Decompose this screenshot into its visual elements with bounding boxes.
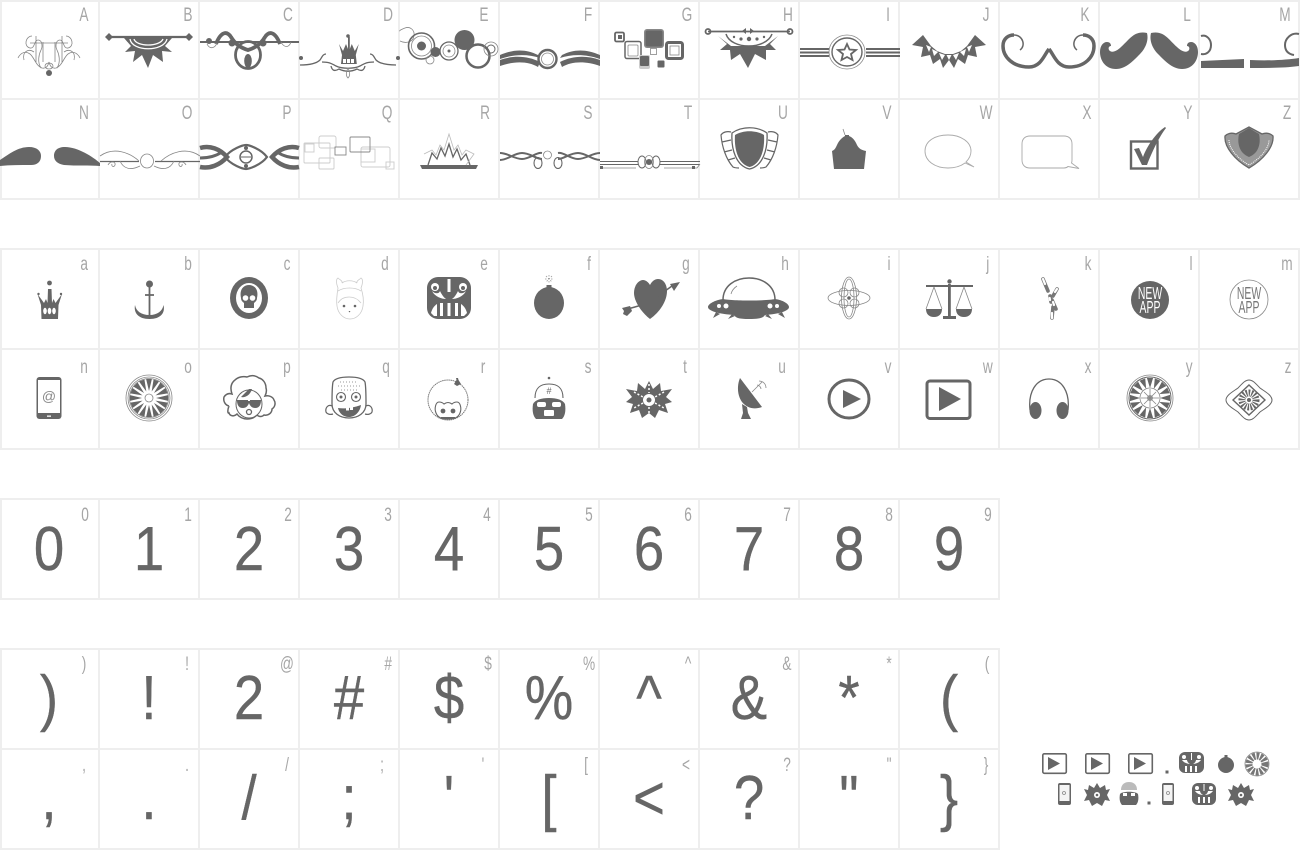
cell ampersand: &: [782, 653, 792, 675]
cell J: bunting: [912, 4, 989, 68]
cell s: cap and beard: #: [546, 386, 552, 396]
cell w: play square: w: [982, 356, 993, 378]
cell asterisk: [838, 653, 892, 733]
cell c: skull medallion: [230, 253, 290, 319]
cell p: afro with shades: p: [283, 356, 291, 378]
cell s: cap and beard: s: [585, 356, 591, 378]
cell s: cap and beard: [533, 356, 591, 419]
cell g: heart with arrow: [622, 253, 690, 319]
cell A: swirl ornament: A: [79, 4, 89, 26]
cell at sign: @: [280, 653, 294, 675]
cell n: smartphone: @: [42, 388, 56, 404]
cell 4: 4: [483, 504, 491, 526]
cell M: handlebar moustache: M: [1279, 4, 1291, 26]
cell apostrophe: ': [482, 754, 484, 776]
cell f: bomb: f: [587, 253, 591, 275]
cell K: curly moustache: [1003, 4, 1094, 67]
cell hash: #: [334, 664, 365, 733]
cell 0: [34, 504, 89, 584]
cell U: winged shield: U: [778, 102, 788, 124]
cell 2: [234, 504, 292, 584]
cell k: pills: [1043, 253, 1092, 318]
cell I: star badge stripes: I: [886, 4, 890, 26]
cell S: twisted ribbon: [500, 102, 600, 168]
cell b: anchor: [135, 253, 192, 319]
cell v: play circle: [829, 356, 892, 418]
cell e: tiki mask: e: [480, 253, 488, 275]
cell P: braided eye ornament: [200, 102, 299, 169]
cell N: wide moustache: [0, 102, 100, 166]
cell V: cupcake: V: [882, 102, 892, 124]
cell q: goofy face: [326, 356, 390, 418]
section: punctuation row two: [41, 754, 989, 833]
cell C: horned ornament: [200, 4, 299, 68]
cell at sign: [234, 653, 294, 733]
cell z: diamond emblem: [1226, 356, 1291, 420]
cell asterisk: *: [886, 653, 892, 675]
cell caret: ^: [636, 664, 662, 733]
cell H: swag banner: [706, 4, 793, 68]
cell B: sunburst banner: [105, 4, 193, 68]
cell A: swirl ornament: [18, 4, 89, 76]
cell double quote: [839, 754, 892, 833]
cell exclamation: !: [141, 664, 157, 733]
cell Z: ornate shield: Z: [1283, 102, 1291, 124]
cell hash: #: [384, 653, 393, 675]
cell L: filled moustache: L: [1183, 4, 1191, 26]
cell semicolon: ;: [380, 754, 384, 776]
cell v: play circle: v: [885, 356, 892, 378]
cell period: [141, 754, 189, 833]
cell apostrophe: [444, 754, 484, 833]
cell t: snowflake: t: [683, 356, 687, 378]
cell 1: [134, 504, 192, 584]
cell slash: [241, 754, 289, 833]
cell 8: 8: [834, 515, 864, 584]
cell l: new app badge filled: [1131, 253, 1193, 319]
cell at sign: 2: [234, 664, 264, 733]
cell question: ?: [734, 764, 764, 833]
cell l: new app badge filled: NEW: [1138, 284, 1162, 304]
cell g: heart with arrow: g: [682, 253, 690, 275]
cell percent: %: [525, 664, 573, 733]
cell exclamation: [141, 653, 189, 733]
cell less than: <: [682, 754, 690, 776]
cell D: crown on swirl line: D: [383, 4, 393, 26]
cell ampersand: [731, 653, 792, 733]
cell O: thin scroll line: O: [182, 102, 192, 124]
cell comma: ,: [82, 754, 86, 776]
cell u: satellite dish: u: [778, 356, 786, 378]
cell k: pills: k: [1085, 253, 1092, 275]
cell close brace: }: [940, 764, 958, 833]
cell W: round speech bubble: W: [980, 102, 993, 124]
cell 5: 5: [585, 504, 593, 526]
cell 9: 9: [984, 504, 992, 526]
section: digits: [34, 504, 992, 584]
cell dollar: [434, 653, 492, 733]
cell E: circles ornament: [400, 4, 498, 68]
cell percent: %: [583, 653, 595, 675]
cell close paren: ): [82, 653, 86, 675]
cell p: afro with shades: [224, 356, 291, 419]
cell e: tiki mask: [427, 253, 488, 319]
cell bracket: [: [541, 764, 557, 833]
cell comma: ,: [41, 764, 57, 833]
cell 8: 8: [885, 504, 893, 526]
cell j: scales: j: [985, 253, 989, 275]
cell o: compass wheel: [126, 356, 192, 421]
cell 3: 3: [384, 504, 392, 526]
cell 0: 0: [81, 504, 89, 526]
cell a: crown: a: [80, 253, 89, 275]
cell W: round speech bubble: [925, 102, 993, 168]
cell x: headphones: [1030, 356, 1092, 419]
cell n: smartphone: [36, 356, 88, 419]
cell 3: [334, 504, 392, 584]
cell dollar: $: [434, 664, 464, 733]
cell a: crown: [37, 253, 89, 319]
cell U: winged shield: [721, 102, 788, 169]
cell X: square speech bubble: X: [1082, 102, 1092, 124]
cell semicolon: [341, 754, 384, 833]
cell j: scales: [926, 253, 989, 319]
cell asterisk: *: [838, 664, 860, 733]
cell I: star badge stripes: [800, 4, 900, 69]
cell bracket: [: [584, 754, 588, 776]
section: lowercase icons: [36, 253, 1293, 421]
cell slash: /: [285, 754, 289, 776]
cell m: new app badge outline: [1230, 253, 1293, 319]
cell h: ufo: h: [781, 253, 789, 275]
cell 9: 9: [934, 515, 964, 584]
cell 6: 6: [684, 504, 692, 526]
cell n: smartphone: n: [80, 356, 88, 378]
cell z: diamond emblem: z: [1285, 356, 1291, 378]
cell bracket: [541, 754, 588, 833]
cell F: banded arc with ring: F: [584, 4, 592, 26]
cell close paren: ): [40, 664, 58, 733]
cell y: ornate wheel: y: [1186, 356, 1193, 378]
cell l: new app badge filled: l: [1189, 253, 1193, 275]
cell close paren: [40, 653, 86, 733]
cell hash: [334, 653, 393, 733]
cell R: spiked crown: R: [480, 102, 490, 124]
cell 7: 7: [783, 504, 791, 526]
cell caret: ^: [685, 653, 691, 675]
cell period: .: [141, 764, 157, 833]
cell 4: 4: [434, 515, 464, 584]
cell o: compass wheel: o: [184, 356, 192, 378]
cell D: crown on swirl line: [299, 4, 400, 78]
cell dollar: $: [484, 653, 492, 675]
cell r: afro skull: [428, 356, 486, 420]
cell m: new app badge outline: m: [1281, 253, 1293, 275]
cell h: ufo: [708, 253, 789, 319]
cell T: lined ornament: T: [684, 102, 692, 124]
cell P: braided eye ornament: P: [282, 102, 292, 124]
cell F: banded arc with ring: [500, 4, 600, 68]
cell ampersand: &: [731, 664, 767, 733]
cell b: anchor: b: [184, 253, 192, 275]
cell 5: [534, 504, 593, 584]
cell open paren: (: [940, 664, 959, 733]
cell q: goofy face: q: [382, 356, 390, 378]
cell close brace: }: [984, 754, 989, 776]
cell caret: [636, 653, 691, 733]
cell 2: 2: [234, 515, 264, 584]
cell Q: light overlapping rectangles: [304, 102, 394, 169]
cell X: square speech bubble: [1022, 102, 1092, 168]
cell G: retro squares: G: [682, 4, 692, 26]
cell d: faint face: [336, 253, 389, 319]
cell S: twisted ribbon: S: [583, 102, 593, 124]
cell Z: ornate shield: [1225, 102, 1291, 168]
cell open paren: (: [985, 653, 990, 675]
cell K: curly moustache: K: [1080, 4, 1090, 26]
cell Y: checkbox: [1131, 102, 1193, 168]
cell 1: 1: [184, 504, 192, 526]
section: uppercase ornaments: [0, 4, 1299, 169]
cell G: retro squares: [615, 4, 692, 69]
cell double quote: ": [839, 764, 859, 833]
cell 7: 7: [734, 515, 764, 584]
cell T: lined ornament: [600, 102, 700, 169]
cell semicolon: ;: [341, 764, 357, 833]
cell 5: 5: [534, 515, 564, 584]
cell question: [734, 754, 791, 833]
cell 0: 0: [34, 515, 64, 584]
cell L: filled moustache: [1100, 4, 1198, 69]
cell 4: [434, 504, 491, 584]
cell C: horned ornament: C: [283, 4, 293, 26]
cell double quote: ": [887, 754, 892, 776]
cell i: thin flower: i: [887, 253, 891, 275]
cell less than: <: [633, 764, 665, 833]
cell question: ?: [783, 754, 791, 776]
section: punctuation row one: [40, 653, 990, 733]
cell d: faint face: d: [381, 253, 389, 275]
cell l: new app badge filled: APP: [1140, 298, 1161, 318]
cell percent: [525, 653, 595, 733]
cell comma: [41, 754, 86, 833]
cell 3: 3: [334, 515, 364, 584]
cell N: wide moustache: N: [79, 102, 89, 124]
cell Y: checkbox: Y: [1183, 102, 1193, 124]
cell 9: [934, 504, 992, 584]
cell period: .: [185, 754, 189, 776]
cell w: play square: [927, 356, 993, 418]
cell exclamation: !: [185, 653, 189, 675]
cell slash: /: [241, 764, 257, 833]
cell less than: [633, 754, 690, 833]
cell 6: 6: [634, 515, 664, 584]
cell B: sunburst banner: B: [183, 4, 193, 26]
cell t: snowflake: [626, 356, 687, 418]
cell apostrophe: ': [444, 764, 454, 833]
cell 1: 1: [134, 515, 164, 584]
cell m: new app badge outline: NEW: [1237, 284, 1261, 304]
cell O: thin scroll line: [100, 102, 200, 169]
cell M: handlebar moustache: [1201, 4, 1299, 68]
cell i: thin flower: [828, 253, 891, 319]
cell 8: [834, 504, 893, 584]
cell V: cupcake: [832, 102, 892, 169]
cell 2: 2: [284, 504, 292, 526]
cell E: circles ornament: E: [479, 4, 489, 26]
cell y: ornate wheel: [1127, 356, 1193, 421]
cell f: bomb: [534, 253, 591, 319]
cell c: skull medallion: c: [284, 253, 290, 275]
cell Q: light overlapping rectangles: Q: [382, 102, 392, 124]
cell H: swag banner: H: [783, 4, 793, 26]
cell R: spiked crown: [420, 102, 490, 169]
cell close brace: [940, 754, 989, 833]
cell x: headphones: x: [1085, 356, 1092, 378]
cell open paren: [940, 653, 990, 733]
sample text: small icon preview: [1043, 752, 1269, 806]
cell 6: [634, 504, 692, 584]
cell J: bunting: J: [983, 4, 989, 26]
cell u: satellite dish: [738, 356, 786, 419]
cell r: afro skull: r: [481, 356, 486, 378]
cell m: new app badge outline: APP: [1239, 298, 1260, 318]
cell 7: [734, 504, 791, 584]
